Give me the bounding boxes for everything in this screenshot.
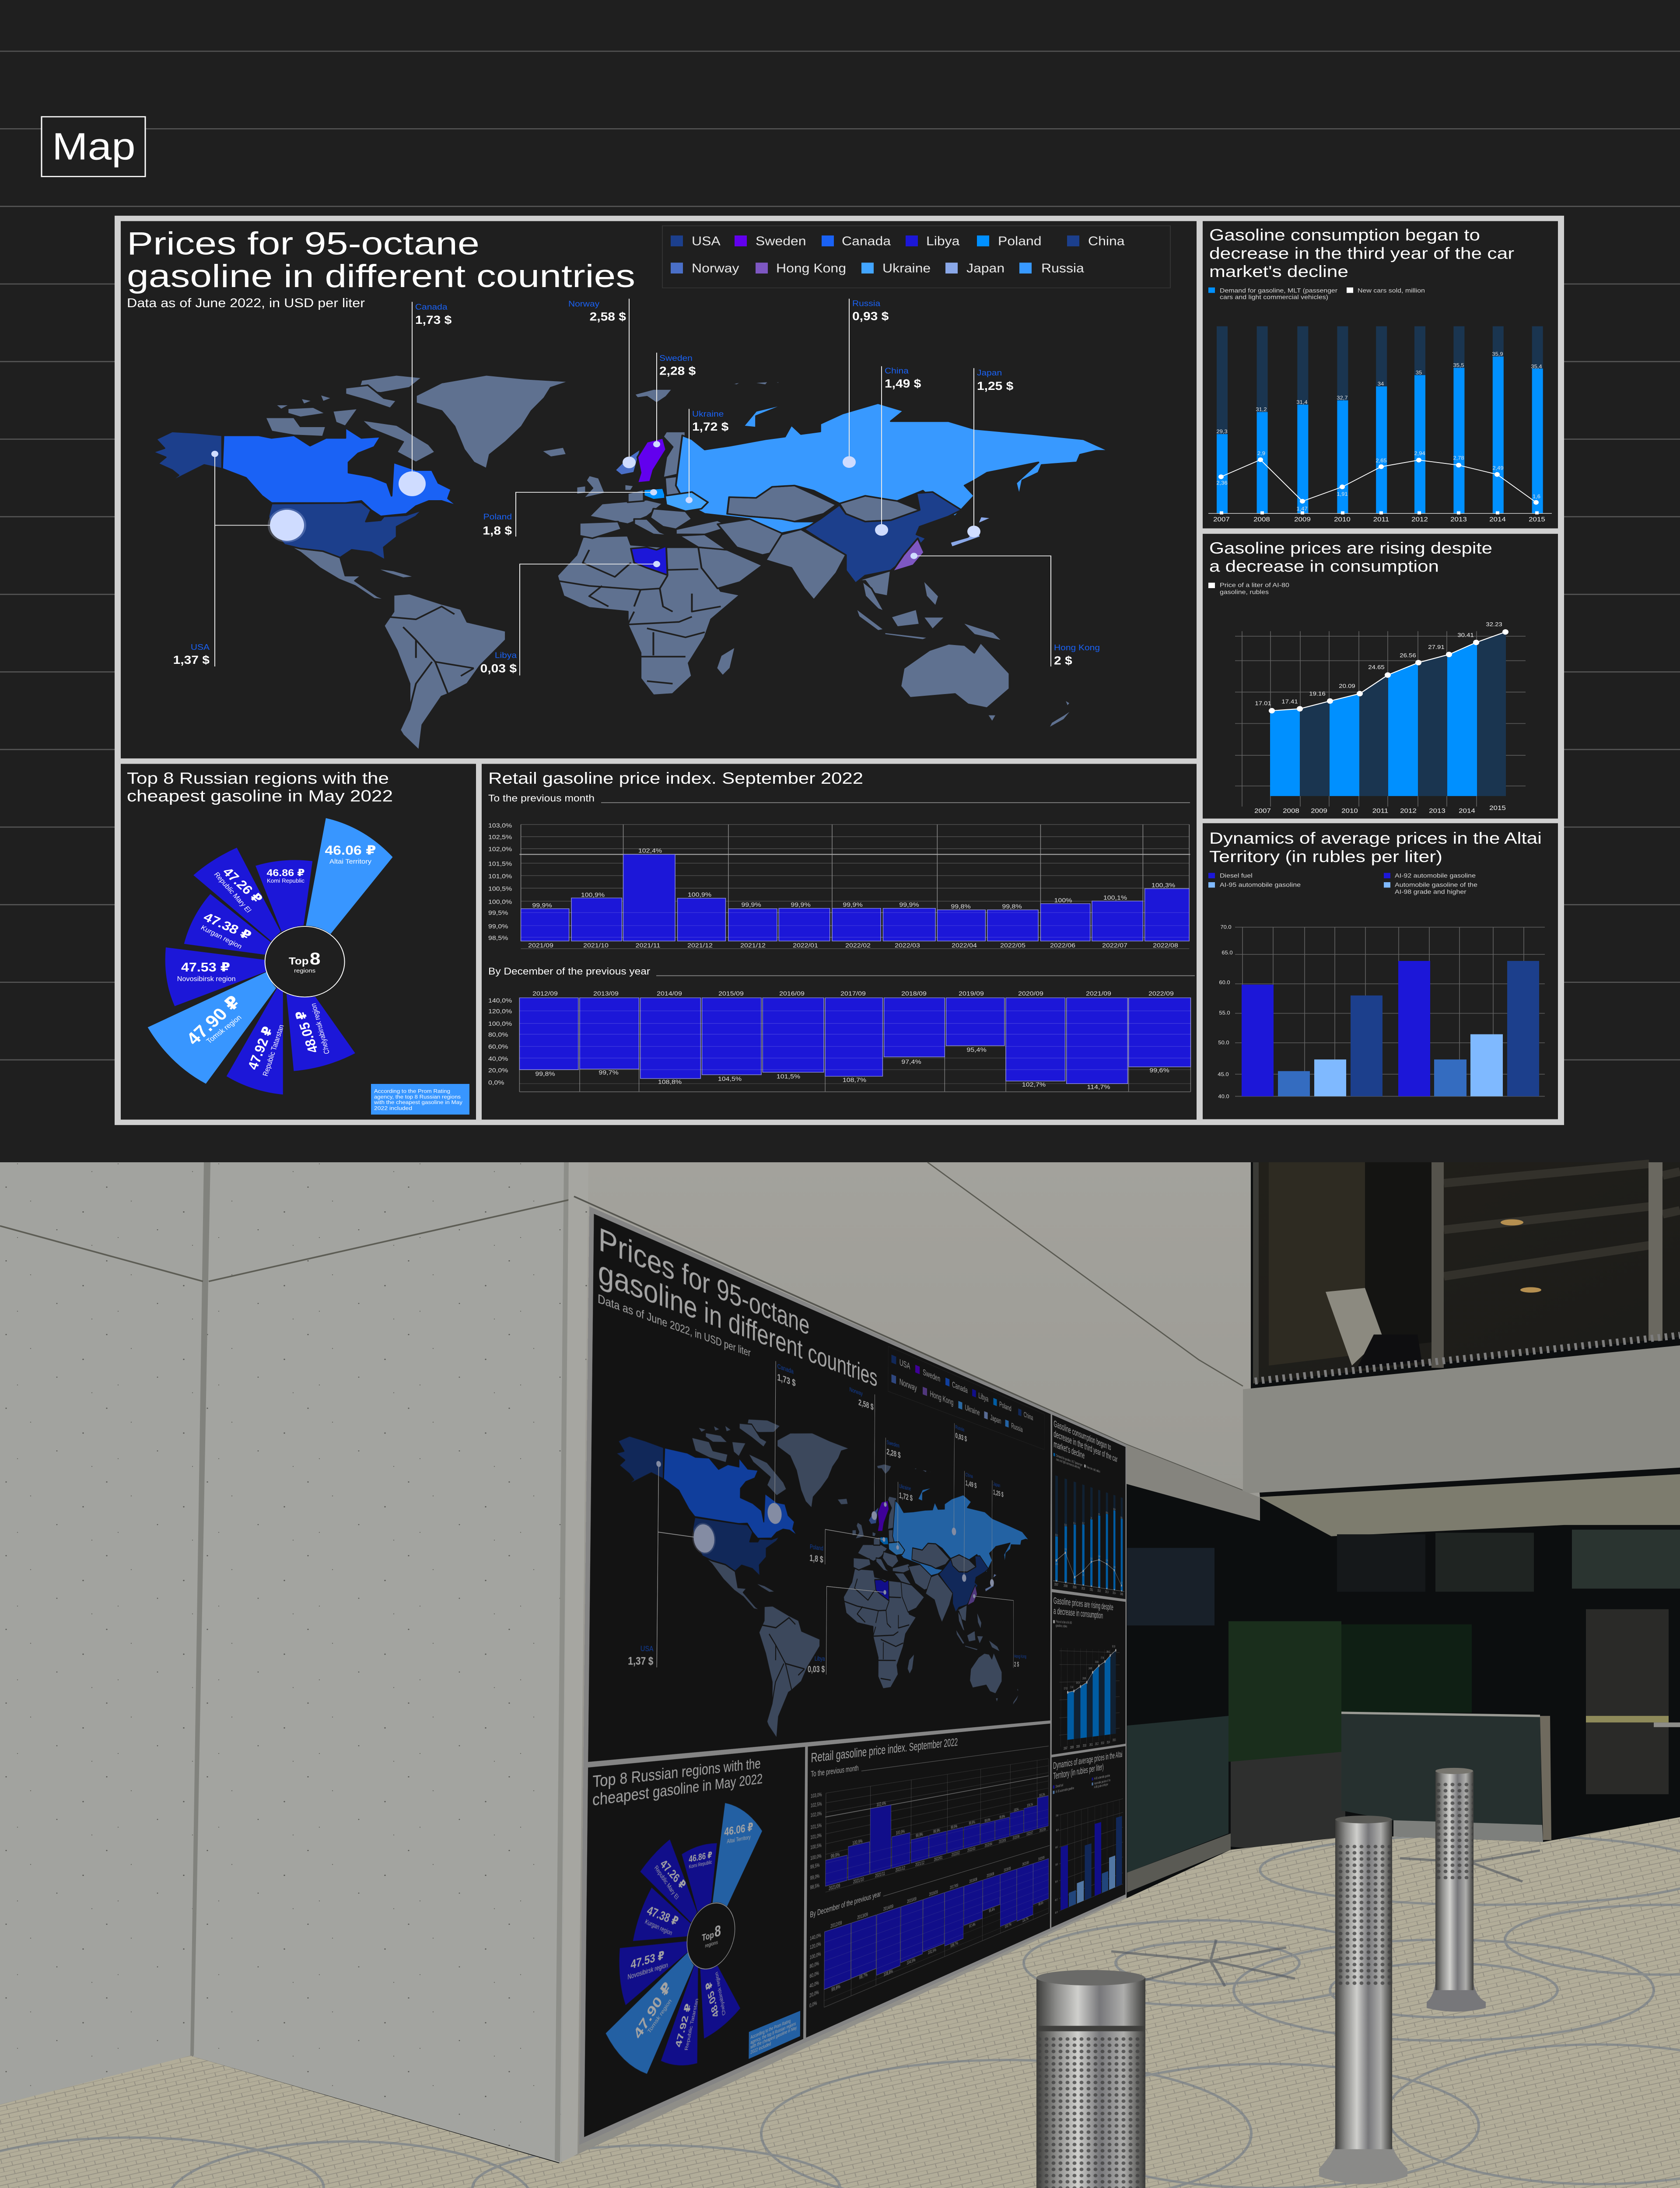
callout: Hong Kong: Hong Kong xyxy=(1054,643,1100,652)
chart: demand bars and car sales line: 35,5 xyxy=(1453,362,1464,368)
chart: to the previous month: 102,5% xyxy=(488,834,512,841)
chart: demand bars and car sales line: 2014 xyxy=(1489,515,1506,523)
map legend: Japan xyxy=(966,262,1004,275)
bollard: back xyxy=(1427,1768,1486,2012)
chart: demand bars and car sales line: 2,78 xyxy=(1453,455,1464,461)
chart: by December of the previous year: 2012/09 xyxy=(532,990,558,997)
heading: consumption: market's decline xyxy=(1209,263,1348,281)
map legend: Sweden xyxy=(756,235,806,248)
chart: by December of the previous year: 108,8% xyxy=(658,1079,682,1086)
callout: China xyxy=(875,366,921,536)
chart: to the previous month: 2021/12 xyxy=(740,942,766,949)
chart: Altai prices bars: 40.0 xyxy=(1218,1094,1229,1100)
chart: demand bars and car sales line: 31,4 xyxy=(1296,400,1308,405)
radial bar chart: Altai Territory xyxy=(329,858,371,865)
chart: demand bars and car sales line: 2,49 xyxy=(1492,465,1504,471)
price legend: gasoline, rubles xyxy=(1220,589,1269,596)
chart: demand bars and car sales line: 2010 xyxy=(1334,515,1351,523)
chart: to the previous month: 102,0% xyxy=(488,846,512,853)
bollard: front xyxy=(1036,1970,1145,2188)
radial bar chart: 47.92 ₽ xyxy=(245,1025,276,1071)
chart: by December of the previous year: 104,5% xyxy=(718,1076,742,1083)
map legend xyxy=(662,226,1170,288)
radial bar chart: Tomsk region xyxy=(205,1013,243,1045)
chart: to the previous month: 100,9% xyxy=(581,891,605,898)
poster mockup in perspective on the wall xyxy=(579,1206,1127,2145)
radial bar chart: Republic Mary El xyxy=(212,871,253,914)
chart: demand bars and car sales line: 2011 xyxy=(1373,515,1389,523)
callout: Libya: Libya xyxy=(495,651,517,660)
chart: AI-80 price area: 2009 xyxy=(1311,807,1327,814)
chart: to the previous month: 2022/06 xyxy=(1050,942,1075,949)
radial bar chart: Komi Republic xyxy=(267,878,304,884)
chart: to the previous month: 101,5% xyxy=(488,861,512,867)
radial bar chart: 8 xyxy=(310,949,320,968)
chart: to the previous month: 2022/04 xyxy=(952,942,977,949)
radial bar chart: Novosibirsk region xyxy=(177,975,236,983)
chart: to the previous month: 100,9% xyxy=(688,891,711,898)
chart: demand bars and car sales line: 32,7 xyxy=(1337,395,1348,401)
callout: Japan: Japan xyxy=(977,368,1002,378)
chart: to the previous month xyxy=(488,793,1190,949)
chart: to the previous month: 99,8% xyxy=(951,903,971,910)
chart: demand bars and car sales line: 35 xyxy=(1416,370,1422,375)
map legend: Canada xyxy=(842,235,891,248)
hedges and planter xyxy=(1228,1621,1472,1853)
chart: AI-80 price area: 2013 xyxy=(1429,807,1446,814)
chart: AI-80 price area: 27.91 xyxy=(1428,644,1445,651)
map legend: USA xyxy=(692,235,721,248)
chart: demand bars and car sales line: 2013 xyxy=(1450,515,1467,523)
callout: Ukraine: 1,72 $ xyxy=(692,421,729,434)
chart: demand bars and car sales line: 2,65 xyxy=(1376,458,1387,464)
chart: AI-80 price area: 32.23 xyxy=(1486,621,1502,628)
Altai legend: Automobile gasoline of the xyxy=(1395,881,1477,888)
chart: to the previous month: 2021/11 xyxy=(636,942,660,949)
chart: to the previous month: 100,5% xyxy=(488,885,512,892)
heading: map title xyxy=(127,225,635,294)
map legend: Norway xyxy=(692,262,739,275)
heading: top 8 regions: cheapest gasoline in May 2022 xyxy=(127,787,393,805)
radial bar chart xyxy=(148,818,392,1094)
chart: by December of the previous year: 2021/09 xyxy=(1086,990,1111,997)
callout: China: China xyxy=(885,367,909,375)
chart: by December of the previous year: 2015/09 xyxy=(718,990,744,997)
callout: Russia xyxy=(843,299,889,468)
radial bar chart: 47.90 ₽ xyxy=(182,992,245,1048)
chart: Altai prices bars: 65.0 xyxy=(1222,950,1233,956)
chart: to the previous month: 99,9% xyxy=(791,901,811,908)
chart: AI-80 price area: 2010 xyxy=(1341,807,1358,814)
chart: demand bars and car sales line: 2,36 xyxy=(1216,480,1228,486)
chart: to the previous month: 100,3% xyxy=(1152,882,1175,889)
map legend: China xyxy=(1088,235,1125,248)
Altai legend: AI-98 grade and higher xyxy=(1395,888,1466,895)
Altai legend: AI-92 automobile gasoline xyxy=(1395,872,1476,879)
callout: Sweden: 2,28 $ xyxy=(659,365,696,378)
radial bar chart: regions xyxy=(294,968,315,974)
main wall behind poster xyxy=(561,1162,1260,2163)
chart: demand bars and car sales line: 2007 xyxy=(1213,515,1230,523)
chart: to the previous month: To the previous month xyxy=(488,793,595,804)
heading: map title: gasoline in different countries xyxy=(127,258,635,294)
consumption legend: Demand for gasoline, MLT (passenger xyxy=(1220,287,1337,294)
heading: prices rising xyxy=(1209,539,1492,575)
chart: demand bars and car sales line: 2009 xyxy=(1294,515,1311,523)
chart: Altai prices bars: 70.0 xyxy=(1220,924,1232,930)
chart: by December of the previous year: 99,7% xyxy=(598,1069,619,1076)
radial bar chart: Chelyabinsk region xyxy=(309,1003,331,1055)
heading: retail price index: Retail gasoline price index. September 2022 xyxy=(488,769,863,787)
radial bar chart: 47.53 ₽ xyxy=(181,961,230,974)
chart: to the previous month: 99,9% xyxy=(741,901,761,908)
panel: gasoline prices xyxy=(1203,534,1558,819)
chart: by December of the previous year: 2022/09 xyxy=(1148,990,1174,997)
chart: to the previous month: 99,0% xyxy=(488,923,508,930)
callout: Norway: 2,58 $ xyxy=(590,310,626,323)
bollard: middle xyxy=(1319,1816,1407,2184)
chart: by December of the previous year: 2016/09 xyxy=(779,990,805,997)
chart: by December of the previous year: 97,4% xyxy=(901,1059,921,1066)
callout: USA xyxy=(173,451,306,666)
chart: to the previous month: 103,0% xyxy=(488,822,512,829)
chart: by December of the previous year: 60,0% xyxy=(488,1043,508,1050)
chart: demand bars and car sales line: 2012 xyxy=(1411,515,1428,523)
heading: consumption: Gasoline consumption began to xyxy=(1209,226,1480,244)
chart: demand bars and car sales line: 35,9 xyxy=(1492,351,1503,357)
chart: AI-80 price area: 2014 xyxy=(1459,807,1475,814)
callout: Libya xyxy=(480,561,660,675)
chart: demand bars and car sales line: 31,2 xyxy=(1256,407,1267,413)
callout: Libya: 0,03 $ xyxy=(480,662,517,675)
chart: by December of the previous year: 100,0% xyxy=(488,1020,512,1027)
callout: Sweden: Sweden xyxy=(659,354,693,363)
callout: Poland: Poland xyxy=(483,512,512,522)
heading: consumption xyxy=(1209,226,1514,281)
heading: Altai dynamics: Territory (in rubles per liter) xyxy=(1209,848,1442,866)
callout: Norway xyxy=(568,299,636,468)
panel: retail gasoline price index xyxy=(482,764,1197,1120)
chart: to the previous month: 100,1% xyxy=(1103,894,1127,901)
chart: by December of the previous year: 102,7% xyxy=(1022,1081,1046,1088)
photo backdrop: building with poster wall xyxy=(0,1162,1680,2188)
heading: prices rising: a decrease in consumption xyxy=(1209,558,1439,575)
chart: AI-80 price area: 2011 xyxy=(1372,807,1388,814)
Altai legend: AI-95 automobile gasoline xyxy=(1220,881,1301,888)
callout: Canada xyxy=(399,302,452,496)
callout: Canada: 1,73 $ xyxy=(415,314,452,327)
callout: Hong Kong: 2 $ xyxy=(1054,654,1072,667)
callout: Prom Rating note: 2022 included xyxy=(374,1105,412,1111)
callout: USA: 1,37 $ xyxy=(173,653,210,666)
chart: by December of the previous year: 2020/09 xyxy=(1018,990,1043,997)
callout: Prom Rating note: According to the Prom Rating xyxy=(374,1088,450,1094)
map subtitle: Data as of June 2022, in USD per liter xyxy=(127,297,365,310)
callout: Japan xyxy=(967,368,1014,537)
upper window block xyxy=(1253,1162,1680,1383)
chart: by December of the previous year: 20,0% xyxy=(488,1067,508,1074)
radial bar chart: 48.05 ₽ xyxy=(293,1009,322,1055)
chart: by December of the previous year: 2018/09 xyxy=(901,990,927,997)
chart: AI-80 price area xyxy=(1235,621,1526,814)
chart: demand bars and car sales line: 1,91 xyxy=(1337,491,1348,497)
chart: demand bars and car sales line: 1,47 xyxy=(1296,506,1308,512)
chart: demand bars and car sales line: 2008 xyxy=(1253,515,1270,523)
chart: demand bars and car sales line: 2,9 xyxy=(1257,451,1265,456)
chart: to the previous month: 99,9% xyxy=(843,901,863,908)
map legend: Hong Kong xyxy=(776,262,846,275)
heading: prices rising: Gasoline prices are rising despite xyxy=(1209,539,1492,558)
chart: to the previous month: 2022/02 xyxy=(845,942,871,949)
callout: Poland xyxy=(483,489,657,537)
callout: Poland: 1,8 $ xyxy=(483,524,512,537)
callout: Ukraine: Ukraine xyxy=(692,410,724,419)
chart: AI-80 price area: 2008 xyxy=(1283,807,1299,814)
callout: Canada: Canada xyxy=(415,302,448,312)
map legend: Poland xyxy=(998,235,1042,248)
poster: fuel price dashboard xyxy=(115,216,1564,1125)
chart: by December of the previous year: 101,5% xyxy=(777,1073,800,1080)
chart: to the previous month: 2022/03 xyxy=(895,942,920,949)
left concrete walls xyxy=(0,1162,574,2163)
chart: to the previous month: 99,9% xyxy=(899,901,919,908)
entrance: doors and windows xyxy=(1127,1530,1680,1794)
chart: demand bars and car sales line: 35,4 xyxy=(1531,364,1542,369)
radial bar chart: 47.38 ₽ xyxy=(201,910,254,943)
chart: AI-80 price area: 2007 xyxy=(1254,807,1271,814)
callout: China: 1,49 $ xyxy=(885,377,921,390)
chart: demand bars and car sales line: 29,3 xyxy=(1216,429,1228,435)
chart: to the previous month: 101,0% xyxy=(488,873,512,880)
callout: Prom Rating note: with the cheapest gasoline in May xyxy=(374,1099,462,1105)
radial bar chart: 47.26 ₽ xyxy=(220,865,265,906)
radial bar chart: Kurgan region xyxy=(200,924,243,950)
map legend: Russia xyxy=(1041,262,1084,275)
callout: USA: USA xyxy=(191,643,210,652)
chart: by December of the previous year: 2019/09 xyxy=(959,990,984,997)
radial bar chart: Republic Tatarstan xyxy=(261,1024,286,1077)
chart: to the previous month: 98,5% xyxy=(488,935,508,942)
chart: by December of the previous year: 0,0% xyxy=(488,1080,504,1086)
chart: by December of the previous year: 40,0% xyxy=(488,1055,508,1062)
world map shapes xyxy=(153,375,1109,750)
chart: to the previous month: 99,5% xyxy=(488,909,508,916)
chart: AI-80 price area: 2015 xyxy=(1489,804,1506,812)
chart: to the previous month: 2022/07 xyxy=(1102,942,1127,949)
panel: Altai Territory price dynamics xyxy=(1203,823,1558,1119)
price legend: Price of a liter of AI-80 xyxy=(1220,582,1289,589)
heading: Altai dynamics: Dynamics of average prices in the Altai xyxy=(1209,829,1542,848)
chart: by December of the previous year: 2014/09 xyxy=(657,990,682,997)
chart: demand bars and car sales line: 2015 xyxy=(1529,515,1545,523)
chart: to the previous month: 99,9% xyxy=(532,902,552,909)
chart: by December of the previous year: 114,7% xyxy=(1087,1083,1110,1090)
chart: by December of the previous year: 80,0% xyxy=(488,1031,508,1038)
chart: Altai prices bars: 50.0 xyxy=(1218,1040,1229,1045)
chart: by December of the previous year: 99,8% xyxy=(535,1070,555,1077)
panel: gasoline consumption xyxy=(1203,221,1558,528)
chart: to the previous month: 2022/08 xyxy=(1153,942,1178,949)
chart: AI-80 price area: 2012 xyxy=(1400,807,1417,814)
map legend: Libya xyxy=(926,235,960,248)
heading: Altai dynamics xyxy=(1209,829,1542,866)
chart: AI-80 price area: 26.56 xyxy=(1400,652,1416,659)
chart: to the previous month: 102,4% xyxy=(638,847,662,854)
chart: Altai prices bars: 45.0 xyxy=(1218,1072,1229,1077)
Altai legend xyxy=(1208,872,1477,895)
chart: by December of the previous year xyxy=(488,966,1195,1092)
chart: to the previous month: 99,8% xyxy=(1002,903,1022,910)
chart: by December of the previous year: 2013/09 xyxy=(593,990,619,997)
chart: to the previous month: 2021/12 xyxy=(687,942,713,949)
chart: AI-80 price area: 17.41 xyxy=(1281,698,1298,705)
callout: Prom Rating note xyxy=(371,1084,469,1115)
callout: Hong Kong xyxy=(910,553,1100,667)
background guide lines xyxy=(0,51,1680,1060)
chart: Altai prices bars xyxy=(1218,924,1545,1100)
radial bar chart: 46.86 ₽ xyxy=(267,868,304,878)
chart: Altai prices bars: 55.0 xyxy=(1219,1010,1230,1016)
chart: by December of the previous year: 99,6% xyxy=(1149,1067,1169,1074)
concrete beam and soffit xyxy=(1127,1345,1680,1536)
chart: to the previous month: 2022/01 xyxy=(793,942,818,949)
chart: AI-80 price area: 30.41 xyxy=(1457,632,1474,638)
chart: to the previous month: 2021/10 xyxy=(583,942,609,949)
radial bar chart: 46.06 ₽ xyxy=(325,843,376,858)
chart: AI-80 price area: 19.16 xyxy=(1309,691,1326,697)
Altai legend: Diesel fuel xyxy=(1220,872,1253,879)
chart: to the previous month: 2021/09 xyxy=(528,942,553,949)
paved floor xyxy=(0,1785,1680,2188)
callout: Japan: 1,25 $ xyxy=(977,380,1014,393)
chart: to the previous month: 2022/05 xyxy=(1000,942,1026,949)
section tag: Map xyxy=(42,117,145,176)
callout: Sweden xyxy=(653,353,696,447)
heading: map title: Prices for 95-octane xyxy=(127,225,480,262)
chart: by December of the previous year: 140,0% xyxy=(488,997,512,1004)
consumption legend xyxy=(1208,287,1425,301)
callout: Ukraine xyxy=(686,409,729,503)
chart: by December of the previous year: 95,4% xyxy=(966,1046,987,1053)
chart: AI-80 price area: 24.65 xyxy=(1368,664,1385,671)
chart: AI-80 price area: 20.09 xyxy=(1339,683,1355,690)
panel: top 8 Russian regions xyxy=(121,764,476,1120)
chart: by December of the previous year: 120,0% xyxy=(488,1008,512,1015)
glass railings xyxy=(1127,1713,1551,1892)
radial bar chart: Top xyxy=(289,956,309,967)
chart: to the previous month: 100,0% xyxy=(488,898,512,905)
heading: consumption: decrease in the third year of the car xyxy=(1209,244,1514,263)
callout: Russia: Russia xyxy=(852,299,881,308)
chart: demand bars and car sales line: 34 xyxy=(1378,381,1384,387)
chart: demand bars and car sales line: 2,94 xyxy=(1414,451,1425,456)
section tag: Map: Map xyxy=(52,125,136,168)
chart: by December of the previous year: By December of the previous year xyxy=(488,966,650,977)
consumption legend: cars and light commercial vehicles) xyxy=(1220,294,1328,301)
callout: Prom Rating note: agency, the top 8 Russian regions xyxy=(374,1094,461,1100)
chart: demand bars and car sales line: 1,6 xyxy=(1533,494,1540,499)
chart: by December of the previous year: 2017/09 xyxy=(840,990,866,997)
callout: Russia: 0,93 $ xyxy=(852,310,889,323)
chart: Altai prices bars: 60.0 xyxy=(1219,980,1230,985)
callout: Norway: Norway xyxy=(568,299,599,309)
heading: top 8 regions xyxy=(127,769,393,805)
panel: world map of gasoline prices xyxy=(121,221,1197,758)
heading: top 8 regions: Top 8 Russian regions with the xyxy=(127,769,389,787)
map legend: Ukraine xyxy=(882,262,931,275)
chart: by December of the previous year: 108,7% xyxy=(843,1076,866,1083)
chart: to the previous month: 100% xyxy=(1054,897,1072,904)
consumption legend: New cars sold, million xyxy=(1358,287,1425,294)
price legend xyxy=(1208,582,1289,596)
chart: AI-80 price area: 17.01 xyxy=(1255,700,1271,707)
chart: demand bars and car sales line xyxy=(1208,326,1552,523)
